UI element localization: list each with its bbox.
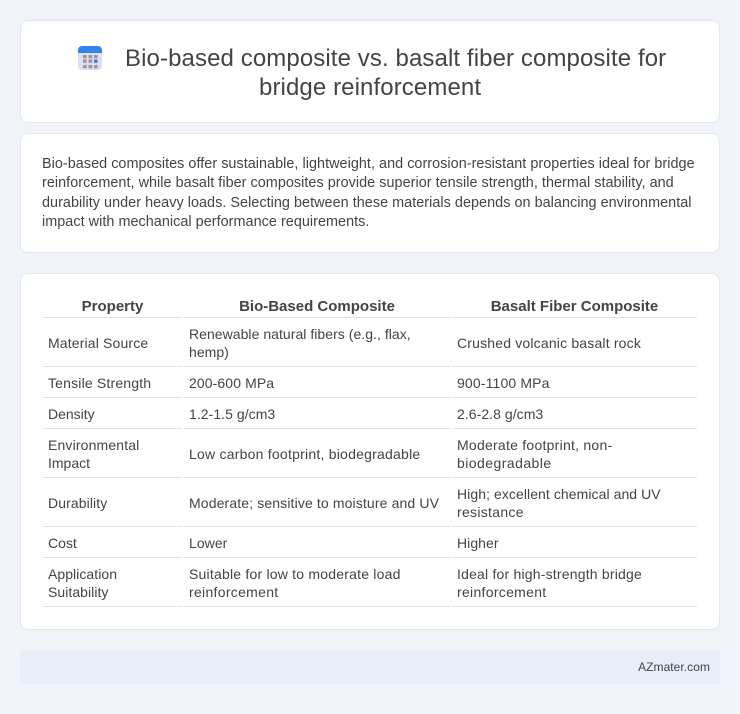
- header: basalt fiber composite: Basalt Fiber Composite: [491, 298, 658, 315]
- summary text: Bio-based composites offer sustainable, lightweight, and corrosion-resistant properties ideal for bridge: [42, 156, 695, 172]
- row: density: [48, 406, 543, 422]
- row: application suitability: Ideal for high-strength bridge: [457, 566, 642, 582]
- row: material source: hemp): [189, 344, 229, 360]
- title: Bio-based composite vs. basalt fiber composite for: [125, 45, 666, 72]
- row: environmental impact: Impact: [48, 455, 90, 471]
- row: tensile strength: [48, 375, 550, 391]
- row: application suitability: reinforcement: [457, 584, 546, 600]
- icon: calendar: [78, 46, 102, 70]
- row: cost: [48, 535, 499, 551]
- row: durability: resistance: [457, 504, 524, 520]
- row: density: Density: [48, 406, 95, 422]
- row: tensile strength: Tensile Strength: [48, 375, 151, 391]
- row: cost: Higher: [457, 535, 499, 551]
- row: material source: Material Source: [48, 335, 148, 351]
- row: environmental impact: [48, 437, 612, 471]
- panel: summary card: [20, 133, 720, 253]
- row: durability: Moderate; sensitive to moisture and UV: [189, 495, 439, 511]
- row: application suitability: [48, 566, 642, 600]
- row: durability: [48, 486, 661, 520]
- row: durability: High; excellent chemical and UV: [457, 486, 661, 502]
- row: material source: [48, 326, 641, 360]
- title: bridge reinforcement: [259, 74, 481, 101]
- summary text: reinforcement, while basalt fiber composites provide superior tensile strength, thermal stability, and: [42, 175, 674, 191]
- panel: title card: [20, 20, 720, 123]
- row: application suitability: Suitable for low to moderate load: [189, 566, 401, 582]
- row: application suitability: Suitability: [48, 584, 108, 600]
- title: [125, 45, 666, 101]
- row: density: 1.2-1.5 g/cm3: [189, 406, 275, 422]
- header: bio-based composite: Bio-Based Composite: [239, 298, 395, 315]
- summary text: durability under heavy loads. Selecting between these materials depends on balancing environmental: [42, 195, 692, 211]
- row: cost: Cost: [48, 535, 77, 551]
- row: application suitability: reinforcement: [189, 584, 278, 600]
- row: tensile strength: 900-1100 MPa: [457, 375, 550, 391]
- row: tensile strength: 200-600 MPa: [189, 375, 274, 391]
- row: application suitability: Application: [48, 566, 117, 582]
- summary text: impact with mechanical performance requirements.: [42, 214, 369, 230]
- row: durability: Durability: [48, 495, 107, 511]
- row: density: 2.6-2.8 g/cm3: [457, 406, 543, 422]
- row: material source: Renewable natural fibers (e.g., flax,: [189, 326, 411, 342]
- panel: comparison table card: [20, 273, 720, 630]
- header: property: Property: [82, 298, 143, 315]
- row: environmental impact: Environmental: [48, 437, 139, 453]
- footer: site credit: AZmater.com: [638, 660, 710, 674]
- summary text: [42, 156, 695, 230]
- row: material source: Crushed volcanic basalt rock: [457, 335, 641, 351]
- row: environmental impact: Moderate footprint, non-: [457, 437, 612, 453]
- row: environmental impact: Low carbon footprint, biodegradable: [189, 446, 420, 462]
- footer bar: [20, 650, 720, 684]
- row: cost: Lower: [189, 535, 227, 551]
- row: environmental impact: biodegradable: [457, 455, 552, 471]
